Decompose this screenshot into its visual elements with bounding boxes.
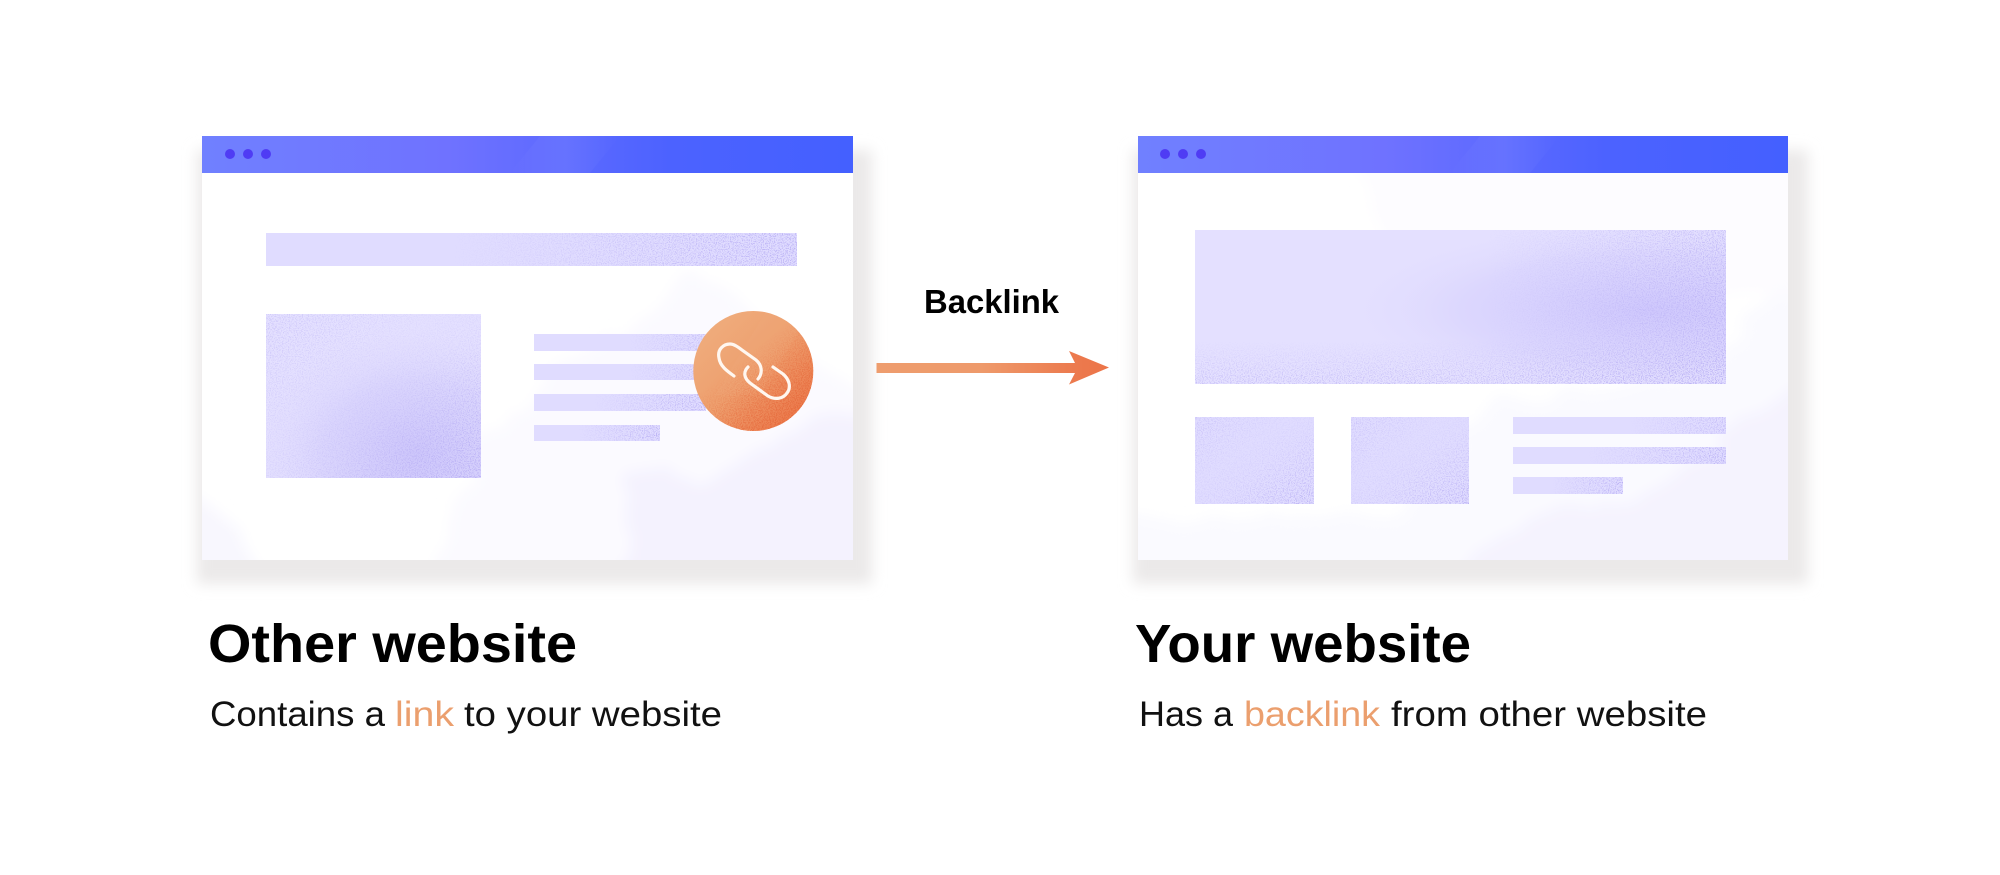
window dots bbox=[1160, 149, 1206, 159]
panel: your website browser window bbox=[1120, 136, 1810, 590]
text: other website description: to your website bbox=[464, 695, 722, 734]
text: other website description: Contains a bbox=[210, 695, 386, 734]
image placeholder two bbox=[1351, 417, 1469, 504]
text: your website description: Has a bbox=[1139, 695, 1234, 734]
label: backlink: Backlink bbox=[924, 283, 1060, 320]
watercolor background bbox=[1470, 392, 1788, 560]
heading placeholder bar bbox=[266, 233, 797, 266]
text placeholder lines bbox=[1513, 417, 1726, 494]
heading: your website: Your website bbox=[1135, 614, 1471, 674]
text: your website description: from other website bbox=[1391, 695, 1707, 734]
text: other website description: link bbox=[395, 695, 455, 734]
image placeholder one bbox=[1195, 417, 1314, 504]
text: your website description bbox=[1139, 695, 1707, 734]
text: your website description: backlink bbox=[1244, 695, 1381, 734]
text: other website description bbox=[210, 695, 722, 734]
browser title bar bbox=[202, 136, 853, 173]
icon: orange link badge bbox=[693, 305, 815, 431]
icon: chain link bbox=[719, 344, 789, 398]
window dots bbox=[225, 149, 271, 159]
watercolor background bbox=[623, 412, 853, 560]
window body bbox=[1138, 136, 1788, 560]
arrow: backlink direction bbox=[876, 351, 1109, 384]
browser title bar bbox=[1138, 136, 1788, 173]
window shadow bbox=[197, 150, 872, 584]
image placeholder bbox=[266, 314, 481, 478]
hero image placeholder bbox=[1195, 230, 1726, 384]
heading: other website: Other website bbox=[208, 614, 577, 674]
text placeholder lines bbox=[534, 334, 706, 441]
window shadow bbox=[1133, 150, 1808, 584]
panel: other website browser window bbox=[180, 136, 880, 590]
window body bbox=[202, 136, 853, 560]
